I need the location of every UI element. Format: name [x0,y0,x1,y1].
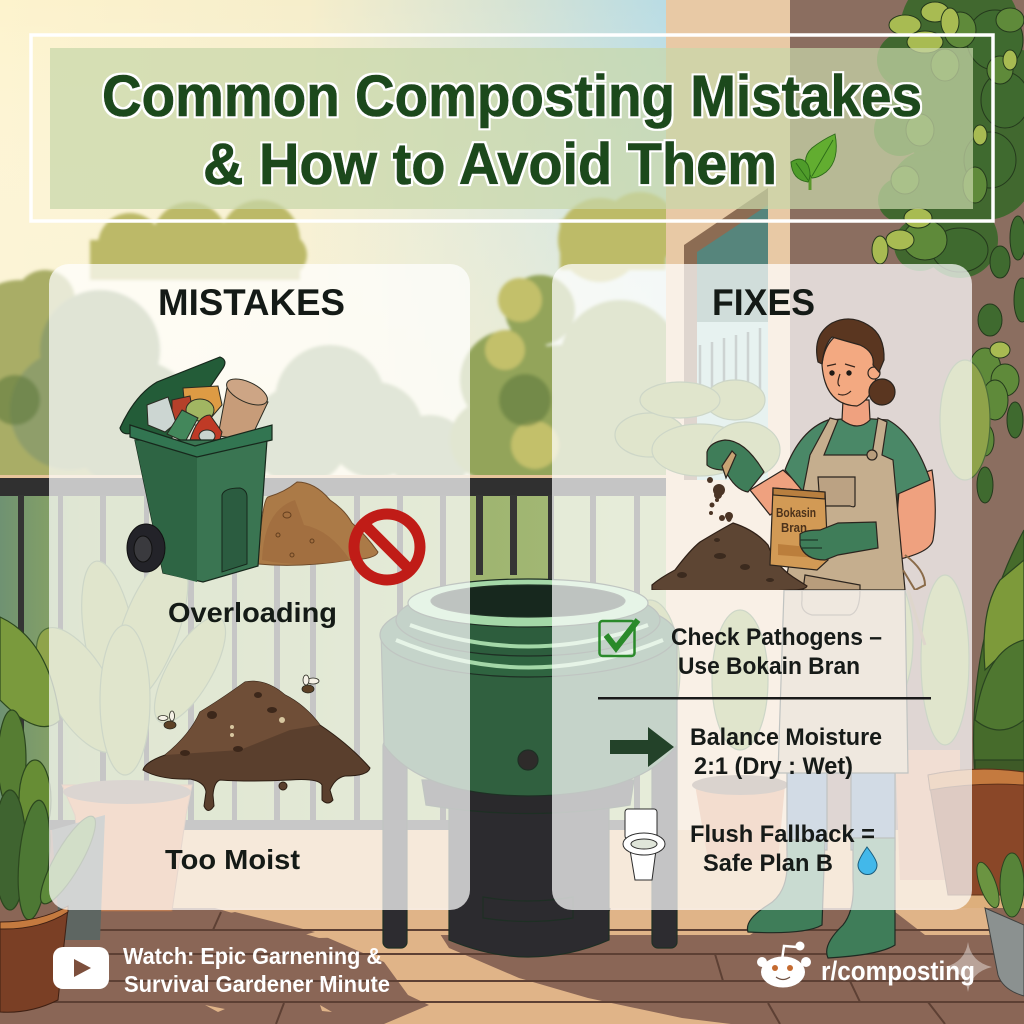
icon: moist compost mound with flies [143,675,370,810]
text: balance moisture [690,724,882,780]
icon: leaf [791,134,836,190]
bin body [135,440,267,582]
icon: water drop [858,847,877,875]
title frame [31,35,993,221]
background: deck [0,830,1024,1024]
title: Common Composting Mistakes [102,64,922,129]
woman right glove [800,522,878,560]
woman head and hair [822,330,878,406]
title: & How to Avoid Them [203,132,777,197]
dirt pile [258,482,378,565]
icon: arrow [610,727,674,767]
woman jeans [787,770,895,850]
background: trees [0,192,695,500]
fix: check pathogens [600,620,882,680]
background: house walls [666,0,1024,830]
background: small grey pot [972,853,1024,996]
text: watch [123,943,390,997]
woman arm right [898,469,936,559]
text: flush fallback: Flush Fallback = [690,821,875,848]
composter [380,579,677,957]
bokashi bag [770,488,828,570]
woman left glove [707,440,764,492]
label: too moist: Too Moist [165,844,300,875]
background: railing [0,475,666,832]
background: right terracotta pot [928,769,1024,895]
title banner [50,48,973,209]
bin rim [130,425,272,457]
composter body [381,630,677,796]
icon: toilet [623,809,665,880]
composter knob [518,750,538,770]
soil mound [652,523,807,592]
fly right [302,675,319,693]
footer: reddit [757,942,992,992]
woman arm left [750,470,805,515]
decorative sparkle [945,942,992,992]
text: watch: Watch: Epic Garnening & [123,943,382,969]
background: vines [872,0,1024,503]
woman neck [842,400,870,426]
icon: check box [600,620,638,656]
bin lid [120,357,225,440]
background: terracotta pot left [0,906,68,1012]
woman upper body: Bran [781,521,807,535]
background: plants behind panels [19,360,990,940]
text: balance moisture: Balance Moisture [690,724,882,751]
woman boots [747,840,825,933]
heading: fixes: FIXES [712,282,815,323]
woman lower body [747,590,925,958]
text: r/composting: r/composting [821,956,975,986]
woman apron [784,418,905,590]
composter base [449,805,609,957]
woman apron lower [778,590,908,773]
footer: youtube [53,943,390,997]
icon: overloaded bin with dirt and prohibition sign [120,357,420,582]
woman shirt [784,418,931,512]
falling compost [707,477,733,522]
composter legs [383,740,677,948]
woman upper body: Bokasin [776,506,816,520]
panel: mistakes [49,264,470,910]
title [102,64,922,197]
bin wheel [127,524,165,572]
text: check pathogens: Use Bokain Bran [678,653,860,680]
background: right plant [974,530,1024,790]
prohibition sign [354,514,420,580]
fix: flush fallback [623,809,877,880]
label: overloading: Overloading [168,597,337,628]
icon: play button [53,947,109,989]
heading: mistakes: MISTAKES [158,282,345,323]
woman upper body [652,319,935,600]
text: check pathogens [671,624,882,680]
text: flush fallback [690,821,875,877]
icon: reddit [757,942,811,988]
background: foreground left plant [0,617,104,921]
text: check pathogens: Check Pathogens – [671,624,882,651]
text: balance moisture: 2:1 (Dry : Wet) [694,753,853,780]
fix: balance moisture [610,724,882,780]
fly left [158,711,176,729]
text: watch: Survival Gardener Minute [124,971,390,997]
text: flush fallback: Safe Plan B [703,850,833,877]
panel: fixes [552,264,972,910]
bin contents [147,374,271,446]
